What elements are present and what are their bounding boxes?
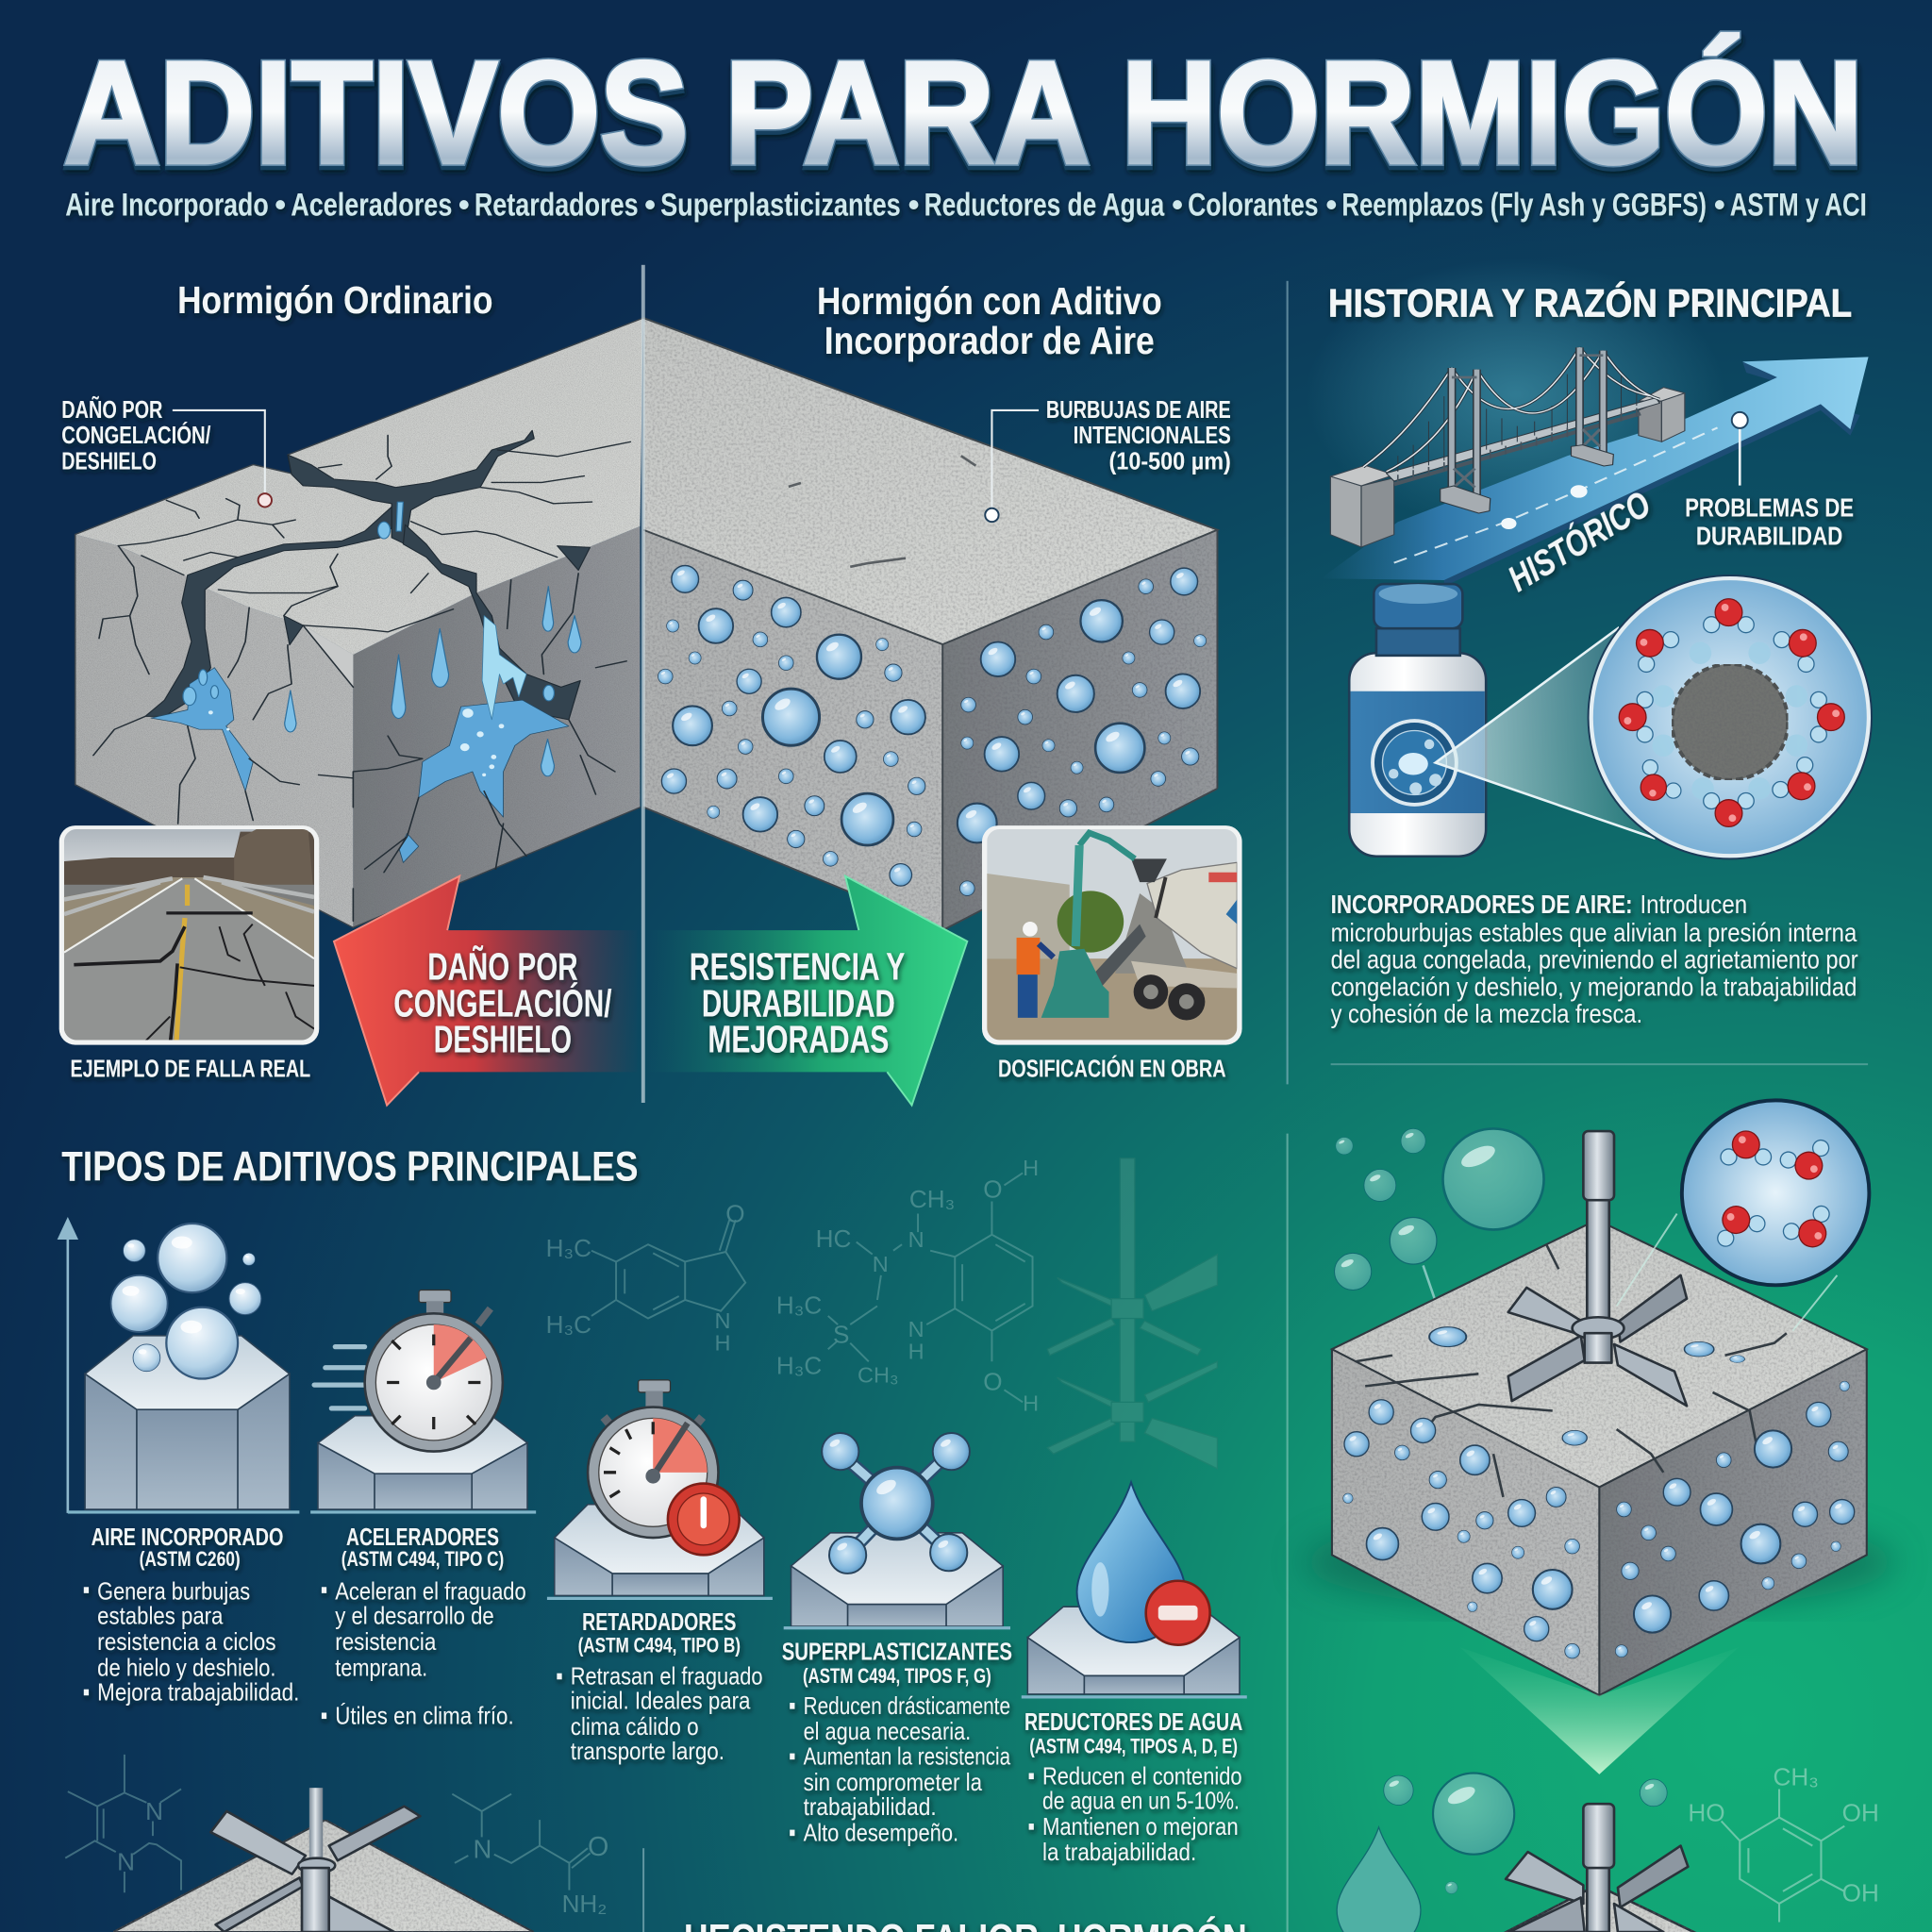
subtitle: • bbox=[644, 188, 656, 224]
item: aire incorporado: (ASTM C260) bbox=[140, 1547, 241, 1571]
heading: air entrained concrete: Hormigón con Aditivo bbox=[817, 279, 1162, 323]
icon: stopwatch bbox=[314, 1291, 503, 1452]
callout: intentional air bubbles: INTENCIONALES bbox=[1074, 421, 1231, 449]
item: retardadores: Retrasan el fraguado bbox=[571, 1661, 762, 1690]
chemical structures background bbox=[546, 1156, 1217, 1469]
item: aire incorporado bbox=[68, 1224, 299, 1706]
callout: intentional air bubbles bbox=[985, 395, 1231, 522]
label: durability problems bbox=[1685, 412, 1854, 550]
item: aire incorporado: Mejora trabajabilidad. bbox=[97, 1677, 299, 1706]
bubbles floating bbox=[1335, 1128, 1544, 1337]
paragraph: air entrainers: y cohesión de la mezcla fresca. bbox=[1331, 999, 1642, 1028]
chemical structures background: H₃C bbox=[546, 1234, 591, 1262]
panel: air entraining mixing illustration bbox=[1287, 1100, 1895, 1932]
item: retardadores: clima cálido o bbox=[571, 1712, 699, 1740]
icon: molecule bbox=[822, 1433, 970, 1574]
item: retardadores: inicial. Ideales para bbox=[571, 1687, 751, 1715]
cracked concrete block bbox=[75, 318, 643, 927]
icon: magnified cement particle bbox=[1589, 575, 1872, 858]
subtitle bbox=[65, 188, 1867, 224]
icon: paddle bbox=[210, 1788, 420, 1932]
lower bubbles, drop and structure: CH₃ bbox=[1774, 1763, 1819, 1791]
icon: bridge bbox=[1330, 347, 1685, 547]
item: aceleradores: Aceleran el fraguado bbox=[335, 1576, 526, 1605]
item: superplastificantes: (ASTM C494, TIPOS F, G) bbox=[803, 1664, 991, 1688]
panel: bottom-left paddle illustration bbox=[65, 1755, 644, 1932]
lower bubbles, drop and structure bbox=[1337, 1763, 1879, 1932]
subtitle: Reemplazos (Fly Ash y GGBFS) bbox=[1341, 188, 1707, 224]
item: reductores de agua: Mantienen o mejoran bbox=[1042, 1812, 1239, 1840]
item: superplastificantes: SUPERPLASTICIZANTES bbox=[782, 1637, 1012, 1665]
chemical structures background: CH₃ bbox=[858, 1362, 899, 1387]
green arrow: durability bbox=[647, 876, 967, 1106]
item: aire incorporado: estables para bbox=[97, 1601, 224, 1629]
subtitle: Reductores de Agua bbox=[924, 188, 1165, 224]
chemical structures background: O bbox=[983, 1175, 1003, 1204]
subtitle: ASTM y ACI bbox=[1730, 188, 1867, 224]
item: reductores de agua: (ASTM C494, TIPOS A, D, E) bbox=[1029, 1735, 1238, 1758]
green arrow: durability: DURABILIDAD bbox=[702, 982, 895, 1025]
item: aire incorporado: de hielo y deshielo. bbox=[97, 1653, 276, 1681]
item: retardadores bbox=[547, 1380, 773, 1765]
chemical structures background: H bbox=[908, 1340, 924, 1364]
axis arrow bbox=[59, 1220, 76, 1513]
item: superplastificantes bbox=[782, 1433, 1012, 1846]
panel: types of admixtures bbox=[59, 1143, 1247, 1866]
item: aire incorporado: Genera burbujas bbox=[97, 1576, 250, 1605]
subtitle: • bbox=[458, 188, 470, 224]
item: superplastificantes: Aumentan la resistencia bbox=[804, 1741, 1010, 1770]
item: aire incorporado: AIRE INCORPORADO bbox=[92, 1523, 283, 1551]
subtitle: Retardadores bbox=[475, 188, 639, 224]
paragraph: air entrainers: congelación y deshielo, y mejorando la trabajabilidad bbox=[1331, 972, 1857, 1001]
callout: freeze-thaw damage: CONGELACIÓN/ bbox=[61, 421, 210, 449]
chemical structures: N bbox=[145, 1797, 163, 1825]
item: aceleradores: (ASTM C494, TIPO C) bbox=[341, 1547, 504, 1571]
red arrow: damage: DESHIELO bbox=[434, 1017, 572, 1060]
item: aceleradores: resistencia bbox=[335, 1627, 437, 1656]
item: aceleradores: y el desarrollo de bbox=[335, 1601, 494, 1629]
red arrow: damage bbox=[334, 876, 637, 1106]
item: superplastificantes: Alto desempeño. bbox=[804, 1818, 958, 1846]
heading: air entrained concrete: Incorporador de Aire bbox=[824, 319, 1155, 362]
icon: water drop with minus bbox=[1077, 1482, 1210, 1645]
panel: comparison of concrete blocks bbox=[59, 265, 1242, 1106]
lower bubbles, drop and structure: OH bbox=[1842, 1878, 1879, 1907]
item: reductores de agua bbox=[1022, 1482, 1247, 1866]
icon: mixing paddle bbox=[1508, 1131, 1687, 1406]
item: reductores de agua: Reducen el contenido bbox=[1042, 1761, 1242, 1790]
aerated mixed block bbox=[1304, 1220, 1895, 1695]
chemical structures background: H bbox=[1023, 1156, 1039, 1180]
subtitle: • bbox=[1714, 188, 1725, 224]
dark open fissures bbox=[145, 430, 590, 720]
item: retardadores: transporte largo. bbox=[571, 1737, 724, 1765]
chemical structures: O bbox=[588, 1832, 608, 1862]
concrete slab bbox=[113, 1820, 534, 1932]
paragraph: air entrainers: INCORPORADORES DE AIRE: bbox=[1331, 890, 1633, 919]
item: superplastificantes: sin comprometer la bbox=[804, 1768, 982, 1796]
chemical structures background: O bbox=[725, 1200, 745, 1228]
chemical structures background: H₃C bbox=[776, 1291, 822, 1319]
lower paddle block bbox=[1454, 1804, 1750, 1932]
chemical structures background: N bbox=[908, 1227, 924, 1252]
photo: on-site dosing bbox=[982, 825, 1242, 1045]
chemical structures background: S bbox=[833, 1321, 849, 1349]
green arrow: durability: MEJORADAS bbox=[708, 1017, 889, 1060]
thin cracks bbox=[93, 435, 630, 921]
chemical structures background: H₃C bbox=[776, 1351, 822, 1379]
callout: intentional air bubbles: (10-500 µm) bbox=[1109, 447, 1231, 475]
paragraph: air entrainers: Introducen bbox=[1640, 890, 1747, 919]
item: aire incorporado: resistencia a ciclos bbox=[97, 1627, 276, 1656]
subtitle: • bbox=[275, 188, 286, 224]
chemical structures background: O bbox=[983, 1367, 1003, 1395]
item: superplastificantes: trabajabilidad. bbox=[804, 1792, 937, 1821]
photo: real failure example bbox=[59, 825, 319, 1045]
item: aceleradores: ACELERADORES bbox=[346, 1523, 499, 1551]
lower bubbles, drop and structure: HO bbox=[1688, 1798, 1725, 1826]
magnifying beam bbox=[1436, 628, 1654, 838]
chemical structures background: CH₃ bbox=[909, 1185, 955, 1213]
label: durability problems: DURABILIDAD bbox=[1696, 521, 1842, 550]
chemical structures: NH₂ bbox=[562, 1890, 607, 1918]
ice filled cracks bbox=[151, 668, 569, 862]
water drops bbox=[183, 502, 581, 776]
icon: stopwatch with alert bbox=[588, 1380, 740, 1555]
item: superplastificantes: Reducen drásticamente bbox=[804, 1691, 1010, 1720]
timeline arrow bbox=[1321, 357, 1869, 587]
photo caption: dosing: DOSIFICACIÓN EN OBRA bbox=[998, 1055, 1226, 1083]
paragraph: air entrainers bbox=[1331, 890, 1858, 1028]
chemical structures: N bbox=[474, 1835, 491, 1864]
item: reductores de agua: la trabajabilidad. bbox=[1042, 1838, 1196, 1866]
photo caption: failure: EJEMPLO DE FALLA REAL bbox=[70, 1055, 310, 1083]
subtitle: • bbox=[1172, 188, 1183, 224]
heading: types: TIPOS DE ADITIVOS PRINCIPALES bbox=[61, 1143, 639, 1190]
subtitle: Aceleradores bbox=[291, 188, 452, 224]
green down arrow bbox=[1460, 1647, 1739, 1774]
subtitle: • bbox=[908, 188, 920, 224]
item: aceleradores bbox=[310, 1291, 536, 1729]
callout: freeze-thaw damage: DAÑO POR bbox=[61, 395, 163, 424]
chemical structures background: N bbox=[873, 1252, 889, 1276]
chemical structures bbox=[65, 1755, 608, 1918]
item: retardadores: RETARDADORES bbox=[582, 1607, 736, 1636]
item: reductores de agua: de agua en un 5-10%. bbox=[1042, 1786, 1240, 1814]
item: aceleradores: temprana. bbox=[335, 1653, 427, 1681]
callout: freeze-thaw damage bbox=[61, 395, 272, 507]
item: superplastificantes: el agua necesaria. bbox=[804, 1717, 971, 1745]
callout: intentional air bubbles: BURBUJAS DE AIRE bbox=[1046, 395, 1231, 424]
item: retardadores: (ASTM C494, TIPO B) bbox=[578, 1634, 741, 1657]
label: durability problems: PROBLEMAS DE bbox=[1685, 492, 1854, 522]
red arrow: damage: DAÑO POR bbox=[427, 944, 578, 988]
item: aceleradores: Útiles en clima frío. bbox=[335, 1701, 514, 1729]
chemical structures background: N bbox=[908, 1317, 924, 1341]
chemical structures background: HC bbox=[816, 1224, 851, 1253]
paragraph: air entrainers: del agua congelada, previniendo el agrietamiento por bbox=[1331, 945, 1858, 974]
chemical structures background: H₃C bbox=[546, 1310, 591, 1339]
heading: ordinary concrete: Hormigón Ordinario bbox=[177, 278, 492, 322]
callout: freeze-thaw damage: DESHIELO bbox=[61, 447, 157, 475]
red arrow: damage: CONGELACIÓN/ bbox=[393, 982, 611, 1025]
lower bubbles, drop and structure: OH bbox=[1842, 1798, 1879, 1826]
subtitle: • bbox=[1325, 188, 1337, 224]
subtitle: Aire Incorporado bbox=[65, 188, 269, 224]
label: historic: HISTÓRICO bbox=[1501, 483, 1657, 600]
chemical structures: N bbox=[117, 1848, 135, 1876]
magnifier: water molecules bbox=[1617, 1100, 1869, 1331]
chemical structures background: N bbox=[715, 1308, 731, 1333]
chemical structures background: H bbox=[1023, 1391, 1039, 1416]
subtitle: Colorantes bbox=[1188, 188, 1319, 224]
panel: history and main reason bbox=[1287, 280, 1872, 1084]
paragraph: air entrainers: microburbujas estables que alivian la presión interna bbox=[1331, 918, 1857, 947]
air entrained concrete block bbox=[643, 318, 1217, 930]
air bubbles bbox=[658, 566, 1207, 896]
green arrow: durability: RESISTENCIA Y bbox=[690, 944, 905, 988]
heading: history: HISTORIA Y RAZÓN PRINCIPAL bbox=[1328, 280, 1852, 325]
icon: admixture bottle bbox=[1349, 584, 1486, 857]
subtitle: Superplasticizantes bbox=[660, 188, 901, 224]
chemical structures background: H bbox=[715, 1331, 731, 1356]
item: reductores de agua: REDUCTORES DE AGUA bbox=[1024, 1707, 1242, 1736]
center divider bbox=[641, 265, 645, 1103]
heading: air entrained concrete bbox=[817, 279, 1162, 362]
